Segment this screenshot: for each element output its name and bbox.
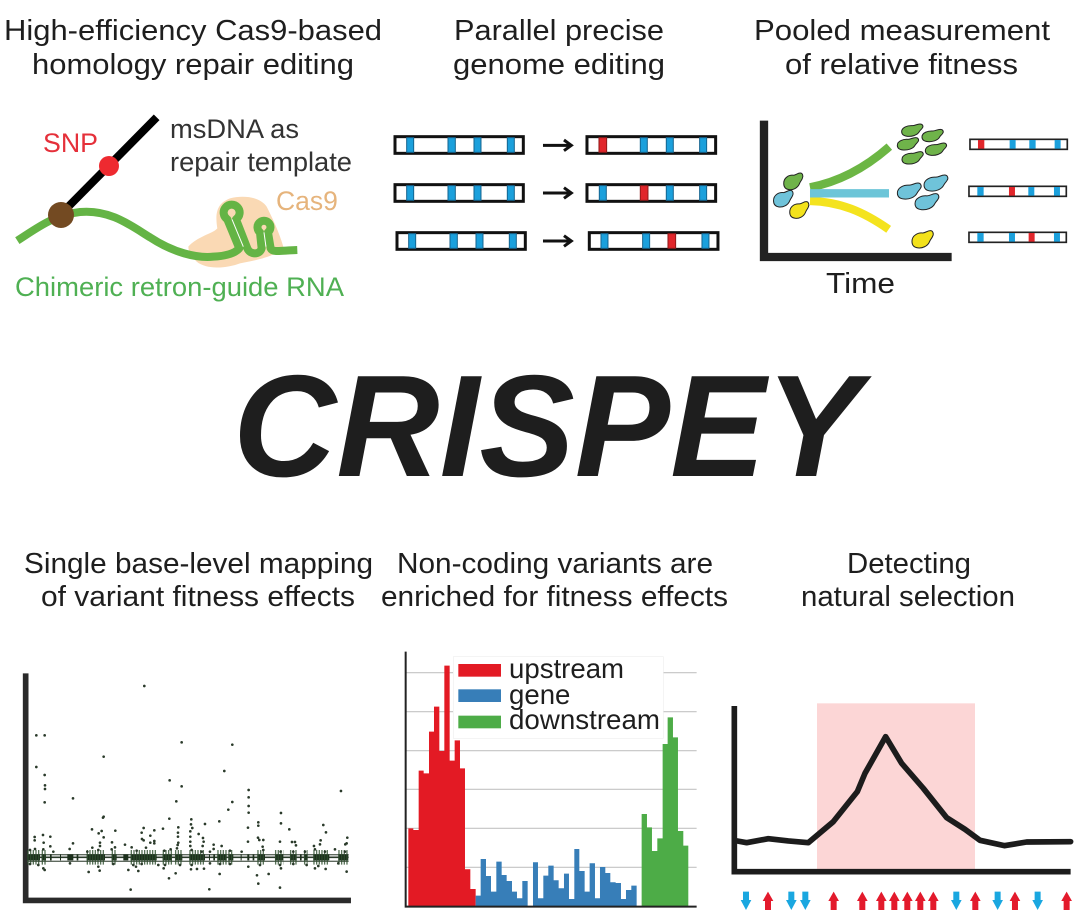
- bars: upstream: [408, 666, 476, 907]
- axes: [764, 121, 952, 257]
- stem gaps: [232, 219, 266, 247]
- heading: non-coding variants: Non-coding variants are: [397, 548, 713, 580]
- SNP dot: [99, 156, 119, 176]
- histogram: [406, 652, 697, 907]
- highlighted region: [817, 703, 975, 870]
- heading: pooled fitness: of relative fitness: [785, 49, 1018, 81]
- label: Cas9: Cas9: [276, 186, 338, 216]
- panel: high-efficiency editing: [4, 15, 382, 302]
- heading: high-efficiency editing: homology repair editing: [32, 49, 354, 81]
- RNA strand: [17, 205, 297, 257]
- panel: non-coding variants: [381, 548, 728, 907]
- down arrows: [741, 892, 1043, 910]
- heading: high-efficiency editing: High-efficiency Cas9-based: [4, 15, 382, 47]
- heading: variant mapping: of variant fitness effects: [41, 581, 355, 613]
- panel: natural selection: [734, 548, 1072, 910]
- grid lines: [406, 673, 697, 867]
- heading: high-efficiency editing: [4, 15, 382, 81]
- panel: variant mapping: [24, 548, 373, 900]
- label: msDNA: msDNA as: [170, 114, 299, 144]
- label: SNP: SNP: [43, 128, 98, 158]
- heading: pooled fitness: [754, 15, 1050, 81]
- legend labels: downstream: [509, 704, 660, 735]
- dense band: [27, 855, 349, 860]
- outlier points: [30, 686, 347, 890]
- genome bars: [395, 137, 718, 249]
- heading: variant mapping: Single base-level mapping: [24, 548, 373, 580]
- up arrows: [763, 892, 1072, 910]
- msDNA strand: [63, 117, 157, 212]
- jitter comb: [27, 835, 348, 879]
- arrows: [543, 140, 571, 246]
- heading: natural selection: Detecting: [847, 548, 971, 580]
- legend labels: [509, 653, 660, 735]
- heading: variant mapping: [24, 548, 373, 613]
- fitness chart: [764, 121, 1067, 257]
- title: CRISPEY: [233, 345, 872, 507]
- junction dot: [48, 202, 74, 228]
- lineage curves: [810, 147, 889, 187]
- heading: parallel editing: [453, 15, 665, 81]
- selection chart: [734, 703, 1072, 910]
- bars: downstream: [642, 717, 688, 907]
- panel: parallel editing: [395, 15, 718, 249]
- threshold lines: [27, 855, 349, 861]
- axes: [406, 652, 697, 907]
- axes: [734, 706, 1071, 872]
- signal line: [737, 737, 1071, 846]
- Cas9 blob: [188, 197, 283, 267]
- heading: natural selection: natural selection: [801, 581, 1015, 613]
- legend: [453, 657, 663, 738]
- legend labels: upstream: [509, 653, 624, 684]
- mini genome bars: [969, 139, 1067, 242]
- axis label: time: Time: [826, 268, 895, 300]
- heading: parallel editing: Parallel precise: [454, 15, 664, 47]
- axes: [26, 673, 351, 900]
- heading: pooled fitness: Pooled measurement: [754, 15, 1050, 47]
- yeast cells: [774, 124, 948, 248]
- heading: parallel editing: genome editing: [453, 49, 665, 81]
- heading: non-coding variants: [381, 548, 728, 613]
- label: msDNA: [170, 114, 352, 177]
- label: chimeric RNA: Chimeric retron-guide RNA: [15, 272, 344, 302]
- panel: pooled fitness: [754, 15, 1067, 300]
- scatter plot: [26, 673, 351, 900]
- bars: gene: [476, 849, 637, 907]
- heading: natural selection: [801, 548, 1015, 613]
- diagram: retron guide RNA: [17, 117, 297, 267]
- label: msDNA: repair template: [170, 147, 352, 177]
- heading: non-coding variants: enriched for fitness effects: [381, 581, 728, 613]
- legend labels: gene: [509, 679, 570, 710]
